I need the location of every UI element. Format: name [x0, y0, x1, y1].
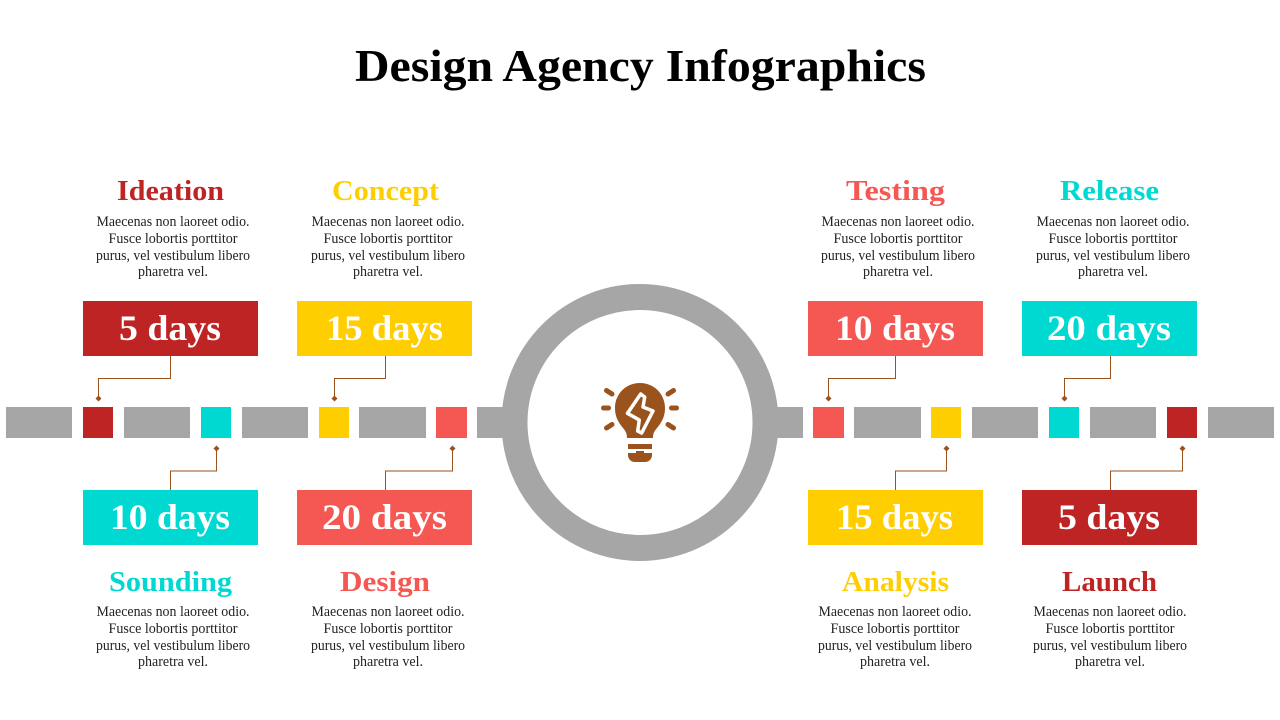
- connector: [386, 446, 456, 490]
- heading: Testing: Testing: [846, 176, 945, 207]
- text block: Launch description: Maecenas non laoreet odio.: [1034, 604, 1186, 620]
- duration box: 10 days: [83, 490, 258, 545]
- text block: Design description: purus, vel vestibulum libero: [311, 638, 465, 654]
- duration box: 15 days: 15 days: [836, 497, 953, 537]
- heading: Ideation: Ideation: [117, 176, 224, 207]
- text block: Sounding description: pharetra vel.: [138, 654, 208, 670]
- text block: Design description: pharetra vel.: [353, 654, 423, 670]
- text block: Analysis description: Fusce lobortis porttitor: [830, 621, 960, 637]
- duration box: 15 days: [297, 301, 472, 356]
- duration box: 20 days: [1022, 301, 1197, 356]
- text block: Analysis description: pharetra vel.: [860, 654, 930, 670]
- panel: Concept: [297, 176, 472, 402]
- text block: Concept description: Fusce lobortis porttitor: [324, 231, 453, 247]
- text block: Release description: Fusce lobortis porttitor: [1048, 231, 1178, 247]
- duration box: 5 days: 5 days: [1058, 497, 1160, 537]
- text block: Analysis description: Maecenas non laoreet odio.: [818, 604, 972, 620]
- panel: Testing: [808, 176, 983, 402]
- heading: Concept: Concept: [332, 176, 440, 207]
- duration box: 5 days: [1022, 490, 1197, 545]
- duration box: 20 days: 20 days: [1047, 308, 1171, 348]
- text block: Concept description: Maecenas non laoreet odio.: [312, 214, 464, 230]
- text block: Design description: Maecenas non laoreet odio.: [312, 604, 464, 620]
- heading: Design: Design: [340, 567, 430, 598]
- central ring: [514, 297, 766, 548]
- text block: Design description: Fusce lobortis porttitor: [324, 621, 453, 637]
- text block: Ideation description: Maecenas non laoreet odio.: [96, 214, 250, 230]
- heading: Release: Release: [1060, 176, 1159, 207]
- connector: [332, 356, 386, 402]
- text block: Analysis description: purus, vel vestibulum libero: [818, 638, 972, 654]
- duration box: 10 days: [808, 301, 983, 356]
- text block: Testing description: pharetra vel.: [863, 264, 933, 280]
- panel: Release: [1022, 176, 1197, 402]
- text block: Concept description: pharetra vel.: [353, 264, 423, 280]
- heading: Sounding: Sounding: [109, 567, 232, 598]
- duration box: 5 days: [83, 301, 258, 356]
- connector: [96, 356, 170, 402]
- heading: Launch: Launch: [1062, 567, 1157, 598]
- duration box: 20 days: [297, 490, 472, 545]
- text block: Concept description: purus, vel vestibulum libero: [311, 248, 465, 264]
- panel: Sounding: [83, 446, 258, 670]
- panel: Analysis: [808, 446, 983, 670]
- heading: Analysis: Analysis: [842, 567, 949, 598]
- text block: Release description: purus, vel vestibulum libero: [1036, 248, 1190, 264]
- text block: Sounding description: Fusce lobortis porttitor: [108, 621, 238, 637]
- duration box: 10 days: 10 days: [835, 308, 955, 348]
- text block: Ideation description: purus, vel vestibulum libero: [96, 248, 250, 264]
- duration box: 5 days: 5 days: [119, 308, 221, 348]
- text block: Release description: pharetra vel.: [1078, 264, 1148, 280]
- panel: Ideation: [83, 176, 258, 402]
- text block: Launch description: pharetra vel.: [1075, 654, 1145, 670]
- duration box: 20 days: 20 days: [322, 497, 447, 537]
- duration box: 15 days: [808, 490, 983, 545]
- duration box: 10 days: 10 days: [110, 497, 230, 537]
- connector: [170, 446, 220, 490]
- text block: Testing description: Fusce lobortis porttitor: [834, 231, 963, 247]
- panel: Launch: [1022, 446, 1197, 670]
- text block: Testing description: Maecenas non laoreet odio.: [822, 214, 974, 230]
- text block: Ideation description: pharetra vel.: [138, 264, 208, 280]
- duration box: 15 days: 15 days: [326, 308, 443, 348]
- text block: Sounding description: purus, vel vestibulum libero: [96, 638, 250, 654]
- text block: Ideation description: Fusce lobortis porttitor: [108, 231, 238, 247]
- text block: Launch description: Fusce lobortis porttitor: [1046, 621, 1175, 637]
- timeline bar: [6, 407, 1274, 438]
- text block: Testing description: purus, vel vestibulum libero: [821, 248, 975, 264]
- connector: [826, 356, 896, 402]
- connector: [896, 446, 950, 490]
- icon: light bulb: [604, 383, 676, 462]
- text block: Release description: Maecenas non laoreet odio.: [1036, 214, 1190, 230]
- panel: Design: [297, 446, 472, 670]
- connector: [1062, 356, 1110, 402]
- text block: Launch description: purus, vel vestibulum libero: [1033, 638, 1187, 654]
- text block: Sounding description: Maecenas non laoreet odio.: [96, 604, 250, 620]
- title: Design Agency Infographics: [355, 40, 926, 91]
- connector: [1110, 446, 1186, 490]
